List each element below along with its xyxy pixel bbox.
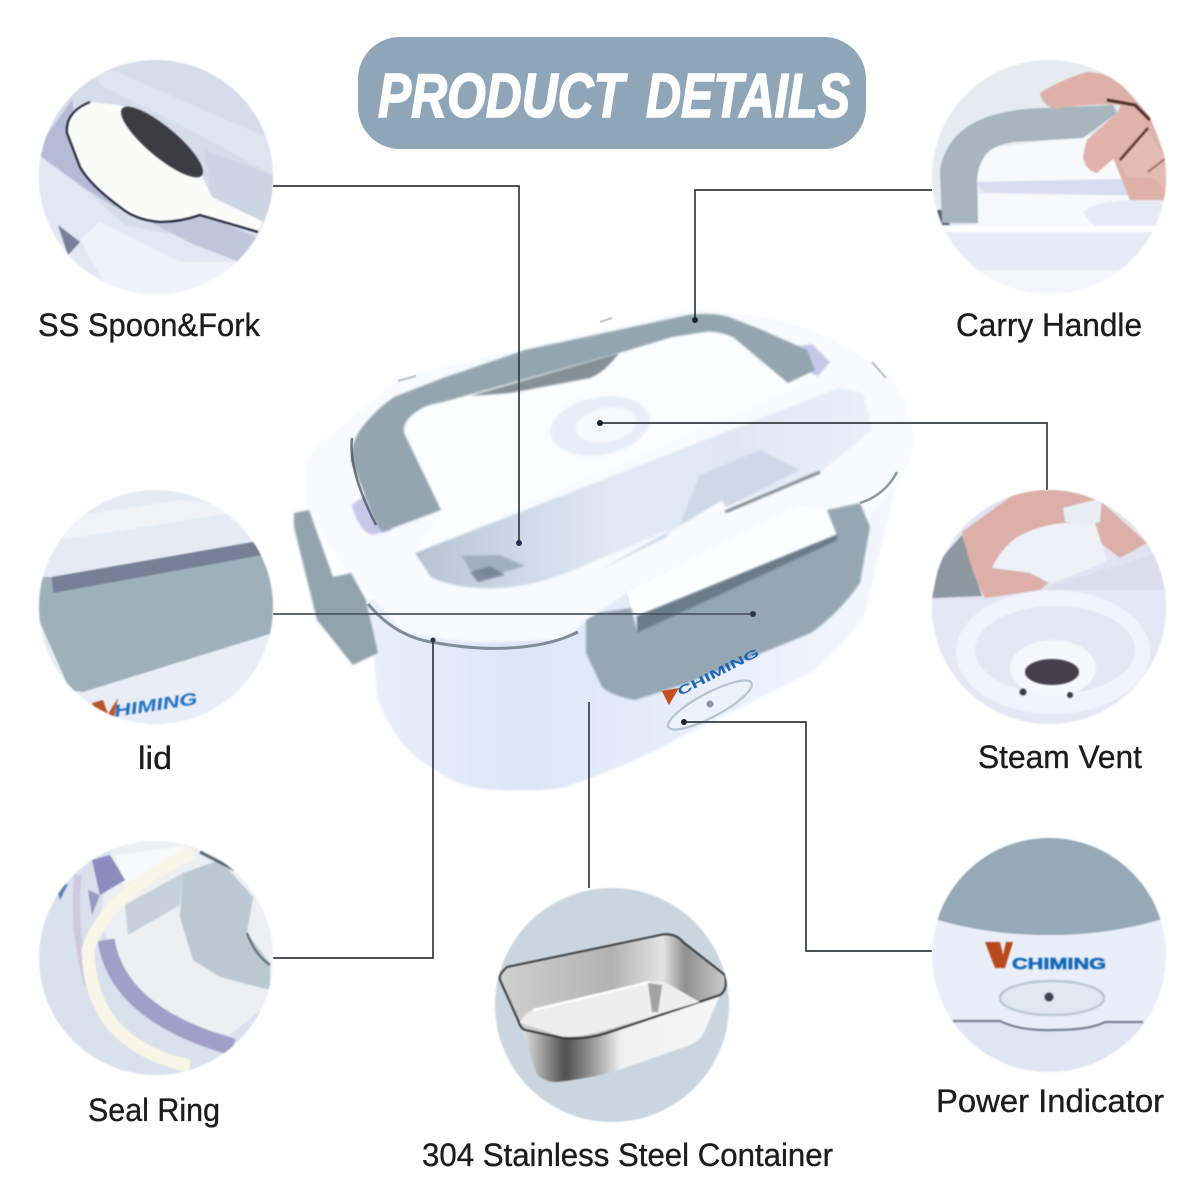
tray outer wall <box>522 995 720 1082</box>
leader line: spoon and fork <box>273 186 522 546</box>
title banner <box>358 37 866 149</box>
leader line: stainless container <box>588 702 590 888</box>
lid clip <box>932 838 1166 935</box>
indicator panel <box>1000 981 1104 1015</box>
circle: stainless steel container <box>494 888 730 1122</box>
white front clip hinge <box>627 505 838 615</box>
label: Carry Handle: Carry Handle <box>956 307 1142 343</box>
cutlery shadows <box>462 450 820 582</box>
leader line: seal ring <box>273 638 436 958</box>
gray backdrop <box>932 535 982 598</box>
handle <box>940 105 1117 223</box>
spoon reflection <box>113 97 211 187</box>
circle: carry handle <box>932 60 1167 294</box>
circle: steam vent <box>932 489 1166 724</box>
groove <box>52 542 262 593</box>
fingers <box>1040 72 1166 200</box>
lid notches <box>398 318 886 381</box>
label: Steam Vent: Steam Vent <box>978 739 1142 775</box>
power logo and indicator <box>663 645 762 738</box>
tray interior <box>500 934 726 1038</box>
leader line: power indicator <box>681 719 932 951</box>
lower body <box>932 1022 1166 1072</box>
product: lunch box <box>294 310 913 791</box>
handle inner shadow <box>352 438 376 525</box>
clip slot shadow <box>637 534 838 633</box>
white lid panel inside handle <box>404 332 820 553</box>
seal ring line <box>368 604 578 648</box>
circle: lid: HIMING <box>113 689 199 721</box>
circle: seal ring <box>38 841 274 1076</box>
steam vent <box>535 380 665 470</box>
spoon outline <box>67 102 258 232</box>
circle: power indicator <box>931 837 1166 1072</box>
logo <box>92 698 118 720</box>
spoon <box>67 102 263 232</box>
label: Seal Ring: Seal Ring <box>88 1092 220 1128</box>
cutlery window <box>415 388 872 588</box>
left clip <box>294 510 378 665</box>
leader line: lid <box>273 611 756 617</box>
container body <box>368 487 896 791</box>
bowl <box>932 590 1166 724</box>
label: SS Spoon&Fork: SS Spoon&Fork <box>38 307 261 343</box>
label: Power Indicator: Power Indicator <box>936 1083 1164 1119</box>
title word: PRODUCT: PRODUCT <box>378 62 628 131</box>
front clip <box>586 503 870 700</box>
label: lid: lid <box>138 740 172 776</box>
power logo and indicator: CHIMING <box>675 645 762 699</box>
cap <box>992 523 1107 582</box>
label: 304 Stainless Steel Container: 304 Stainless Steel Container <box>422 1137 833 1173</box>
lid clip face <box>39 542 273 692</box>
lid <box>306 310 913 642</box>
carry handle <box>351 314 815 532</box>
circle: lid <box>38 490 274 724</box>
circle: spoon and fork <box>38 60 274 294</box>
logo: CHIMING <box>1012 956 1106 973</box>
seal ring bands <box>106 940 233 1047</box>
hand <box>962 490 1147 598</box>
leader line: carry handle <box>692 190 932 323</box>
logo <box>985 942 1106 973</box>
leader line: steam vent <box>597 420 1047 490</box>
tray floor <box>520 981 700 1037</box>
gray lid part <box>180 860 270 990</box>
purple handle hinges <box>352 490 392 535</box>
